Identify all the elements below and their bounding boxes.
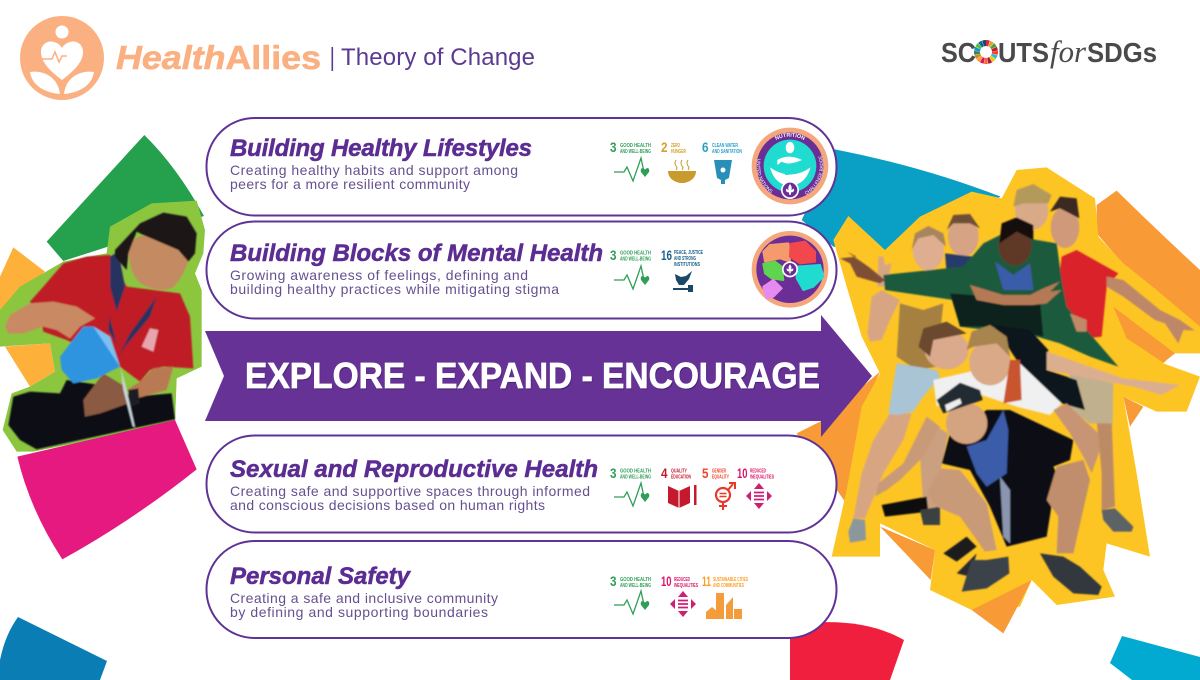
description [230,590,498,620]
description: and conscious decisions based on human rights [230,497,545,513]
photo: group of scouts [840,184,1195,595]
title: Theory of Change: Theory of Change [341,44,535,71]
SDG 2 [661,139,696,183]
SDG 3: GOOD HEALTH [620,250,651,256]
logo: Scouts for SDGs: SC [941,37,976,68]
heading: Building Healthy Lifestyles [230,135,532,162]
SDG 6: 6 [702,139,709,155]
panel: Building Blocks of Mental Health [206,222,836,318]
logo: Scouts for SDGs: SDGs [1087,37,1157,68]
SDG 6: CLEAN WATER [712,143,739,149]
SDG 10: INEQUALITIES [674,583,698,589]
SDG 10: REDUCED [750,468,766,474]
SDG 11 [702,573,748,619]
background shape: bottom red [790,622,904,680]
panel: Building Healthy Lifestyles [206,117,838,216]
panel: Personal Safety [206,541,836,638]
logo: Scouts for SDGs [941,34,1157,69]
logo: Scouts for SDGs: for [1050,34,1087,69]
SDG 16: INSTITUTIONS [674,262,700,268]
heading: Building Blocks of Mental Health [230,240,603,267]
SDG 3: AND WELL-BEING [620,474,651,480]
SDG 4: 4 [661,465,668,481]
left photo cluster [0,135,205,559]
SDG 2: ZERO [671,143,680,149]
heading: Personal Safety [230,563,412,590]
SDG 3 [610,247,651,289]
shape: orange inner accents [880,307,1175,633]
SDG 2: HUNGER [671,149,686,155]
SDG 4 [661,465,696,508]
description: by defining and supporting boundaries [230,604,488,620]
SDG 10: 10 [661,573,672,589]
description: building healthy practices while mitigating stigma [230,281,559,297]
shape: orange lower left [797,372,880,502]
SDG 10 [661,573,698,617]
banner shadow text: EXPLORE - EXPAND - ENCOURAGE [246,356,821,398]
SDG 3: 3 [610,573,617,589]
panel: Sexual and Reproductive Health [206,436,836,532]
SDG 4: QUALITY [671,468,687,474]
right photo cluster [797,149,1200,633]
description: peers for a more resilient community [230,176,470,192]
SDG 3 [610,465,651,506]
description [230,267,559,297]
SDG 3: AND WELL-BEING [620,256,651,262]
SDG 10: 10 [737,465,748,481]
description [230,483,590,513]
badge: nutrition: UNITED NATIONS [756,159,772,193]
SDG 3: GOOD HEALTH [620,468,651,474]
SDG 10: REDUCED [674,577,690,583]
SDG 11: SUSTAINABLE CITIES [713,577,748,583]
SDG 3: 3 [610,139,617,155]
description [230,162,518,192]
description: Creating a safe and inclusive community [230,590,498,606]
SDG 5: EQUALITY [712,474,729,480]
description: Creating healthy habits and support among [230,162,518,178]
SDG 3: AND WELL-BEING [620,149,651,155]
badge: nutrition: CHALLENGE BADGE [805,156,824,194]
SDG 3: 3 [610,247,617,263]
shape: lower orange [5,343,55,387]
SDG 3: 3 [610,465,617,481]
banner text: EXPLORE - EXPAND - ENCOURAGE [245,355,820,396]
SDG 11: 11 [702,573,711,589]
SDG 5: GENDER [712,468,726,474]
SDG 11: AND COMMUNITIES [713,583,744,589]
SDG 16: AND STRONG [674,256,696,262]
SDG 2: 2 [661,139,668,155]
SDG 4: EDUCATION [671,474,691,480]
shape: dark green [47,135,204,261]
SDG 10 [737,465,774,509]
logo: HealthAllies emblem [20,16,104,100]
background shape: bottom right teal [1110,636,1200,680]
SDG 3: AND WELL-BEING [620,583,651,589]
badge: nutrition [752,128,828,204]
arrow banner [205,315,872,437]
shape: magenta panel [17,420,197,559]
SDG 10: INEQUALITIES [750,474,774,480]
shape: orange right [1097,191,1200,353]
SDG 3: GOOD HEALTH [620,577,651,583]
divider bar [332,47,333,71]
SDG 3 [610,139,651,181]
shape: yellow backing [832,167,1200,610]
SDG 5: 5 [702,465,709,481]
SDG 6 [702,139,742,184]
shape: lime backing [0,201,205,452]
background shape: bottom left blue [0,617,107,680]
description: Creating safe and supportive spaces through informed [230,483,590,499]
SDG 3 [610,573,651,614]
shape: teal [802,149,1001,252]
photo: scout pouring water [5,213,197,449]
badge: nutrition: NUTRITION [774,133,806,140]
logo: Scouts for SDGs: UTS [998,37,1049,68]
shape: upper orange [0,247,45,310]
SDG 16 [661,247,703,292]
SDG 6: AND SANITATION [712,149,742,155]
logo wordmark: HealthAllies: Health Allies [116,39,321,76]
badge: mental health puzzle [752,231,828,308]
heading: Sexual and Reproductive Health [230,456,598,483]
SDG 16: 16 [661,247,672,263]
SDG 3: GOOD HEALTH [620,143,651,149]
SDG 16: PEACE, JUSTICE [674,250,703,256]
SDG 5 [702,465,735,510]
description: Growing awareness of feelings, defining and [230,267,528,283]
